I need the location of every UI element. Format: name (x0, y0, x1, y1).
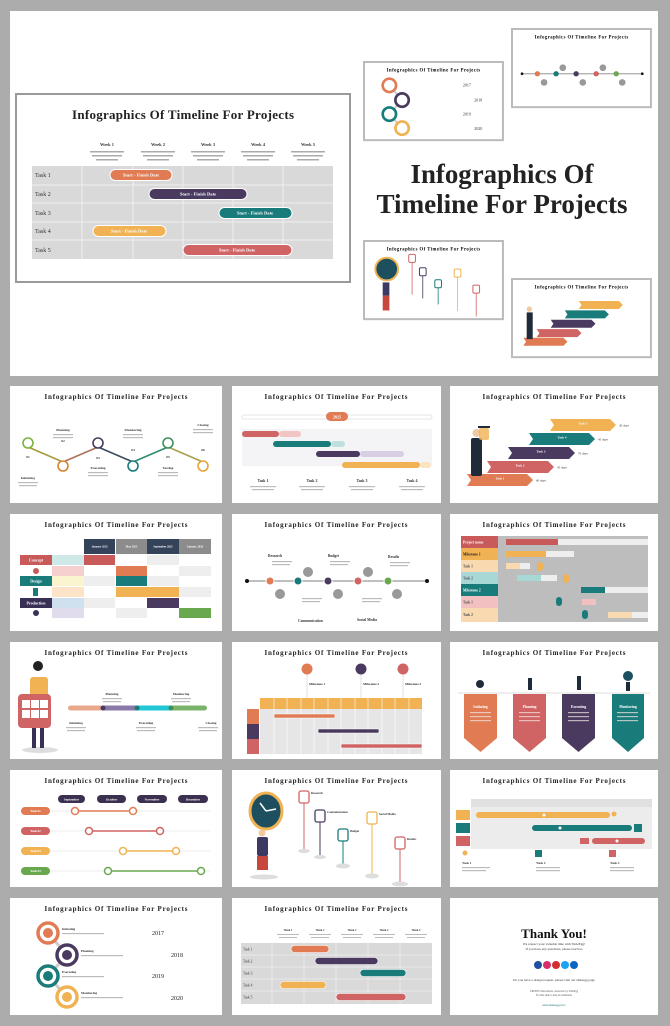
slide 10: task pills with months (10, 770, 222, 887)
thank you heading: Thank You! (521, 926, 587, 941)
slide 1: wave timeline: 05 (166, 455, 170, 459)
slide 1: wave timeline: Initiating (21, 476, 35, 480)
thumb: circles timeline: 2018 (474, 97, 482, 102)
slide 9: banners: Monitoring (619, 705, 637, 709)
slide 1: wave timeline (10, 386, 222, 503)
slide 5: milestone line: Research (268, 554, 282, 558)
slide 2: bar gantt 2025: Task 3 (356, 478, 368, 483)
week headers: Week 4 (251, 142, 266, 147)
row labels (461, 536, 498, 622)
slide 10: task pills with months: Infographics Of Timeline For Projects (44, 777, 188, 785)
slide 13: vertical circles: Executing (62, 970, 76, 974)
slide 1: wave timeline: Monitoring (124, 428, 142, 432)
slide 9: banners: Planning (523, 705, 537, 709)
slide 9: banners: Infographics Of Timeline For Projects (482, 649, 626, 657)
slide 5: milestone line: Communication (298, 619, 323, 623)
slide 10: task pills with months: Task 01 (30, 809, 41, 813)
slide 3: step arrows: Task 4 (558, 436, 567, 440)
slide 13: vertical circles: Planning (81, 949, 94, 953)
slide 11: clock and pins (232, 770, 441, 887)
wave line (28, 447, 203, 462)
slide 1: wave timeline: 06 (201, 448, 205, 452)
social icons (534, 961, 578, 969)
week headers: Week 5 (301, 142, 316, 147)
slide 4: table timeline: May 2025 (126, 546, 138, 548)
thumb: clock pins (364, 241, 503, 319)
hero title: Infographics Of (410, 159, 594, 189)
slide 8: milestone gantt with orange header: Milestone 1 (309, 682, 326, 686)
panel: hero cover (10, 11, 658, 376)
week headers: Week 1 (100, 142, 115, 147)
businessman (471, 426, 490, 476)
slide 2: bar gantt 2025: Task 4 (406, 478, 418, 483)
week headers (90, 142, 325, 160)
slide 10: task pills with months: December (186, 797, 201, 801)
slide 6: gray gantt with milestones: Milestone 2 (463, 588, 481, 592)
slide 12: gantt with icons: Infographics Of Timeline For Projects (482, 777, 626, 785)
slide 8: milestone gantt with orange header: Milestone 2 (363, 682, 380, 686)
slide 14: mini gantt: Task 5 (243, 996, 253, 1000)
thumb: horizontal milestones: Infographics Of Timeline For Projects (535, 35, 628, 40)
slide 6: gray gantt with milestones: Task 2 (463, 613, 473, 617)
slide 3: step arrows: 70 days (578, 452, 589, 456)
slide 12: gantt with icons: Task 3 (610, 861, 620, 865)
slide 15: thank you: CREDIT: Illustrations, characters by SlideEgg (530, 990, 579, 993)
week headers: Week 2 (151, 142, 166, 147)
thumb: step arrows (512, 279, 651, 357)
gantt bars (93, 170, 292, 256)
main slide title: Infographics Of Timeline For Projects (72, 107, 294, 122)
slide 13: vertical circles: 2017 (152, 931, 164, 937)
slide 13: vertical circles: 2018 (171, 953, 183, 959)
thumb: horizontal milestones (512, 29, 651, 107)
slide 5: milestone line: Budget (328, 554, 340, 558)
slide 6: gray gantt with milestones: Task 2 (463, 576, 473, 580)
slide 11: clock and pins: Social Media (379, 812, 396, 816)
pins (23, 438, 208, 471)
slide 11: clock and pins: Results (407, 837, 417, 841)
slide 4: table timeline: Design (30, 578, 43, 584)
slide 10: task pills with months: Task 03 (30, 849, 41, 853)
slide 1: wave timeline: Closing (197, 423, 209, 427)
gantt grid: Task 3 (35, 211, 51, 217)
week headers: Week 3 (201, 142, 216, 147)
slide 7: person with calendar timeline: Initiating (69, 721, 83, 725)
thumb: step arrows: Infographics Of Timeline For Projects (535, 285, 628, 290)
slide 1: wave timeline: 02 (61, 439, 65, 443)
header cells (84, 539, 211, 554)
slide 3: step arrows: Task 2 (516, 464, 525, 468)
slide 2: bar gantt 2025: Task 1 (257, 478, 269, 483)
arrows (467, 419, 616, 486)
slide 3: step arrows: Task 5 (579, 422, 588, 426)
slide 3: step arrows (450, 386, 658, 503)
slide 11: clock and pins: Budget (350, 829, 359, 833)
bars (476, 812, 645, 844)
slide 4: table timeline: January 2026 (187, 546, 204, 548)
slide 1: wave timeline: 01 (26, 455, 30, 459)
gantt bars: Start - Finish Date (180, 192, 216, 197)
slide 9: banners: Executing (571, 705, 586, 709)
slide 13: vertical circles: Monitoring (81, 991, 97, 995)
slide 13: vertical circles: 2019 (152, 974, 164, 980)
slide 6: gray gantt with milestones: Project name (463, 540, 484, 544)
gantt grid: Task 4 (35, 229, 51, 235)
slide 8: milestone gantt with orange header: Infographics Of Timeline For Projects (264, 649, 408, 657)
slide 14: mini gantt: Task 3 (243, 972, 253, 976)
bars (280, 946, 406, 1000)
slide 1: wave timeline: Planning (56, 428, 70, 432)
slide 3: step arrows: 45 days (557, 466, 568, 470)
thumb: circles timeline: 2019 (463, 111, 471, 116)
milestone dots (266, 577, 392, 585)
slide 10: task pills with months: November (145, 797, 160, 801)
thumb: circles timeline: 2017 (463, 83, 471, 88)
gantt bars: Start - Finish Date (123, 173, 159, 178)
slide 6: gray gantt with milestones: Task 1 (463, 600, 473, 604)
slide 14: mini gantt (232, 898, 441, 1015)
slide 14: mini gantt: Week 3 (348, 929, 357, 932)
slide 12: gantt with icons: Task 2 (536, 861, 546, 865)
slide 14: mini gantt: Week 4 (380, 929, 389, 932)
slide 3: step arrows: 30 days (619, 424, 630, 428)
slide 14: mini gantt: Task 2 (243, 960, 253, 964)
main slide: gantt table (16, 94, 350, 282)
gantt bars: Start - Finish Date (219, 248, 255, 253)
slide 4: table timeline (10, 514, 222, 631)
slide 4: table timeline: Concept (29, 558, 44, 562)
slide 3: step arrows: 60 days (536, 478, 547, 482)
slide 11: clock and pins: Research (311, 791, 323, 795)
slide 7: person with calendar timeline: Closing (206, 721, 217, 725)
timeline bar (68, 706, 207, 710)
slide 4: table timeline: September 2025 (153, 546, 173, 548)
slide 13: vertical circles: Initiating (62, 927, 76, 931)
task tags (456, 810, 470, 846)
thumb: clock pins: Infographics Of Timeline For Projects (387, 247, 480, 252)
slide 2: bar gantt 2025 (232, 386, 441, 503)
slide 15: thank you: Do you have a design request, please visit our slideegg page (513, 978, 595, 983)
month pills (58, 795, 208, 803)
slide 9: banners: Initiating (473, 705, 488, 709)
slide 6: gray gantt with milestones: Milestone 1 (463, 552, 481, 556)
person (250, 830, 278, 880)
left labels (20, 555, 52, 616)
slide 14: mini gantt: Infographics Of Timeline For Projects (264, 905, 408, 913)
slide 7: person with calendar timeline: Monitoring (173, 692, 190, 696)
slide 5: milestone line: Results (388, 555, 400, 559)
slide 4: table timeline: January 2025 (91, 546, 108, 548)
clock (250, 793, 282, 829)
gantt grid (32, 166, 333, 259)
slide 1: wave timeline: 03 (96, 456, 100, 460)
hero title: Timeline For Projects (376, 189, 628, 219)
slide 3: step arrows: 45 days (598, 438, 609, 442)
slide 15: thank you: www.slideegg.com (542, 1003, 566, 1007)
thumb: circles timeline: 2020 (474, 126, 482, 131)
slide 1: wave timeline: Infographics Of Timeline For Projects (44, 393, 188, 401)
gantt bars: Start - Finish Date (237, 211, 273, 216)
slide 14: mini gantt: Task 4 (243, 984, 253, 988)
slide 12: gantt with icons (450, 770, 658, 887)
gantt bars: Start - Finish Date (111, 229, 147, 234)
slide 6: gray gantt with milestones: Infographics Of Timeline For Projects (482, 521, 626, 529)
slide 11: clock and pins: Communication (327, 810, 348, 814)
slide 2: bar gantt 2025: Task 2 (306, 478, 318, 483)
slide 13: vertical circles (10, 898, 222, 1015)
slide 14: mini gantt: Week 2 (316, 929, 325, 932)
slide 7: person with calendar timeline: Executing (139, 721, 154, 725)
slide 7: person with calendar timeline: Infographics Of Timeline For Projects (44, 649, 188, 657)
slide 3: step arrows: Infographics Of Timeline For Projects (482, 393, 626, 401)
illustration: person with calendar (18, 661, 58, 753)
hero title (376, 159, 628, 219)
pins (299, 791, 405, 849)
grid fills (84, 555, 211, 618)
slide 10: task pills with months: Task 04 (30, 869, 41, 873)
thumb: circles timeline: Infographics Of Timeline For Projects (387, 68, 480, 73)
icons and labels (462, 850, 616, 857)
slide 1: wave timeline: Executing (91, 466, 106, 470)
slide 3: step arrows: Task 1 (496, 476, 505, 480)
slide 4: table timeline: Production (26, 600, 46, 606)
slide 10: task pills with months: September (64, 797, 80, 801)
gantt grid: Task 1 (35, 173, 51, 179)
slide 8: milestone gantt with orange header: Milestone 3 (405, 682, 422, 686)
slide 10: task pills with months: October (106, 797, 118, 801)
slide 14: mini gantt: Task 1 (243, 948, 253, 952)
slide 15: thank you (450, 898, 658, 1015)
slide 9: banners (450, 642, 658, 759)
slide 13: vertical circles: Infographics Of Timeline For Projects (44, 905, 188, 913)
slide 6: gray gantt with milestones: Task 1 (463, 564, 473, 568)
milestone markers (302, 664, 408, 698)
gantt grid: Task 5 (35, 248, 51, 254)
slide 15: thank you: We respect your valuable time with SlideEgg! (523, 942, 585, 946)
slide 5: milestone line: Social Media (357, 618, 377, 622)
banners (464, 694, 644, 752)
year pill (326, 412, 348, 421)
slide 12: gantt with icons: Task 1 (462, 861, 472, 865)
slide 14: mini gantt: Week 1 (284, 929, 293, 932)
slide 5: milestone line: Infographics Of Timeline For Projects (264, 521, 408, 529)
slide 7: person with calendar timeline (10, 642, 222, 759)
slide 11: clock and pins: Infographics Of Timeline For Projects (264, 777, 408, 785)
slide 2: bar gantt 2025: 2025 (333, 414, 341, 420)
slide 7: person with calendar timeline: Planning (105, 692, 119, 696)
slide 4: table timeline: Infographics Of Timeline For Projects (44, 521, 188, 529)
slide 2: bar gantt 2025: Infographics Of Timeline For Projects (264, 393, 408, 401)
circles (38, 923, 77, 1007)
slide 6: gray gantt with milestones (450, 514, 658, 631)
slide 15: thank you: If you have any questions, please reach us (525, 947, 583, 952)
slide 10: task pills with months: Task 02 (30, 829, 41, 833)
bars (506, 539, 648, 618)
slide 5: milestone line (232, 514, 441, 631)
slide 13: vertical circles: 2020 (171, 996, 183, 1002)
slide 1: wave timeline: Testing (163, 466, 174, 470)
gantt grid: Task 2 (35, 192, 51, 198)
slide 14: mini gantt: Week 5 (412, 929, 421, 932)
slide 15: thank you: For this slide to map its attribution (536, 994, 573, 997)
bars (242, 431, 431, 468)
slide 8: milestone gantt with orange header (232, 642, 441, 759)
task rows (21, 807, 210, 875)
thumb: circles timeline (364, 62, 503, 140)
slide 1: wave timeline: 04 (131, 448, 135, 452)
slide 3: step arrows: Task 3 (537, 450, 546, 454)
